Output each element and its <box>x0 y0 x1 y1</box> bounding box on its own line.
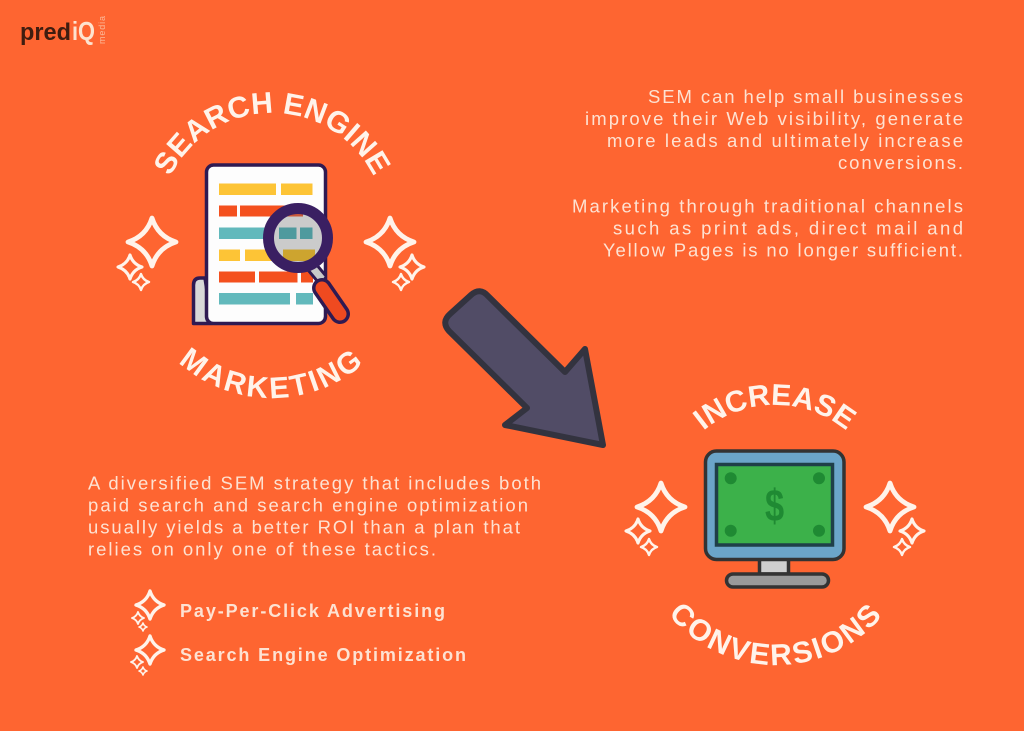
list item: pay-per-click: Pay-Per-Click Advertising <box>180 601 445 621</box>
text block: SEM benefits: conversions. <box>838 152 963 173</box>
icon: sparkles right of monitor <box>866 483 924 555</box>
icon: sparkles left of monitor <box>626 483 685 555</box>
logo: prediQ media: pred <box>20 19 71 46</box>
heading: search engine marketing <box>155 92 391 398</box>
heading: search engine marketing: MARKETING <box>180 347 360 398</box>
heading: increase conversions: CONVERSIONS <box>672 604 880 666</box>
text block: SEM benefits: SEM can help small businesses <box>648 86 963 107</box>
text block: diversified strategy: relies on only one of these tactics. <box>88 538 436 560</box>
logo: prediQ media: iQ <box>72 16 95 46</box>
icon: sparkles right of document <box>366 218 424 290</box>
text block: diversified strategy: paid search and search engine optimization <box>88 494 528 516</box>
arrow <box>445 291 603 445</box>
list item: search engine optimization: Search Engine Optimization <box>180 645 466 665</box>
text block: SEM benefits <box>585 86 963 173</box>
text block: diversified strategy <box>88 472 541 560</box>
text block: traditional channels: such as print ads, direct mail and <box>613 218 963 238</box>
text block: diversified strategy: usually yields a better ROI than a plan that <box>88 516 520 538</box>
text block: traditional channels <box>572 196 963 260</box>
text block: SEM benefits: more leads and ultimately increase <box>607 130 963 151</box>
icon: monitor with dollar bill: $ <box>765 481 784 531</box>
icon: sparkles left of document <box>118 218 176 290</box>
text block: traditional channels: Marketing through traditional channels <box>572 196 963 216</box>
logo: prediQ media: media <box>97 16 107 44</box>
heading: search engine marketing: SEARCH ENGINE <box>155 92 391 176</box>
icon: monitor with dollar bill <box>706 451 844 587</box>
heading: increase conversions <box>672 384 880 666</box>
logo: prediQ media <box>20 16 107 46</box>
text block: traditional channels: Yellow Pages is no longer sufficient. <box>603 240 963 260</box>
list item: pay-per-click <box>132 591 445 631</box>
icon: document with magnifying glass <box>194 165 340 324</box>
text block: SEM benefits: improve their Web visibility, generate <box>585 108 963 129</box>
heading: increase conversions: INCREASE <box>692 384 857 430</box>
list item: search engine optimization <box>131 636 466 675</box>
text block: diversified strategy: A diversified SEM strategy that includes both <box>88 472 541 494</box>
